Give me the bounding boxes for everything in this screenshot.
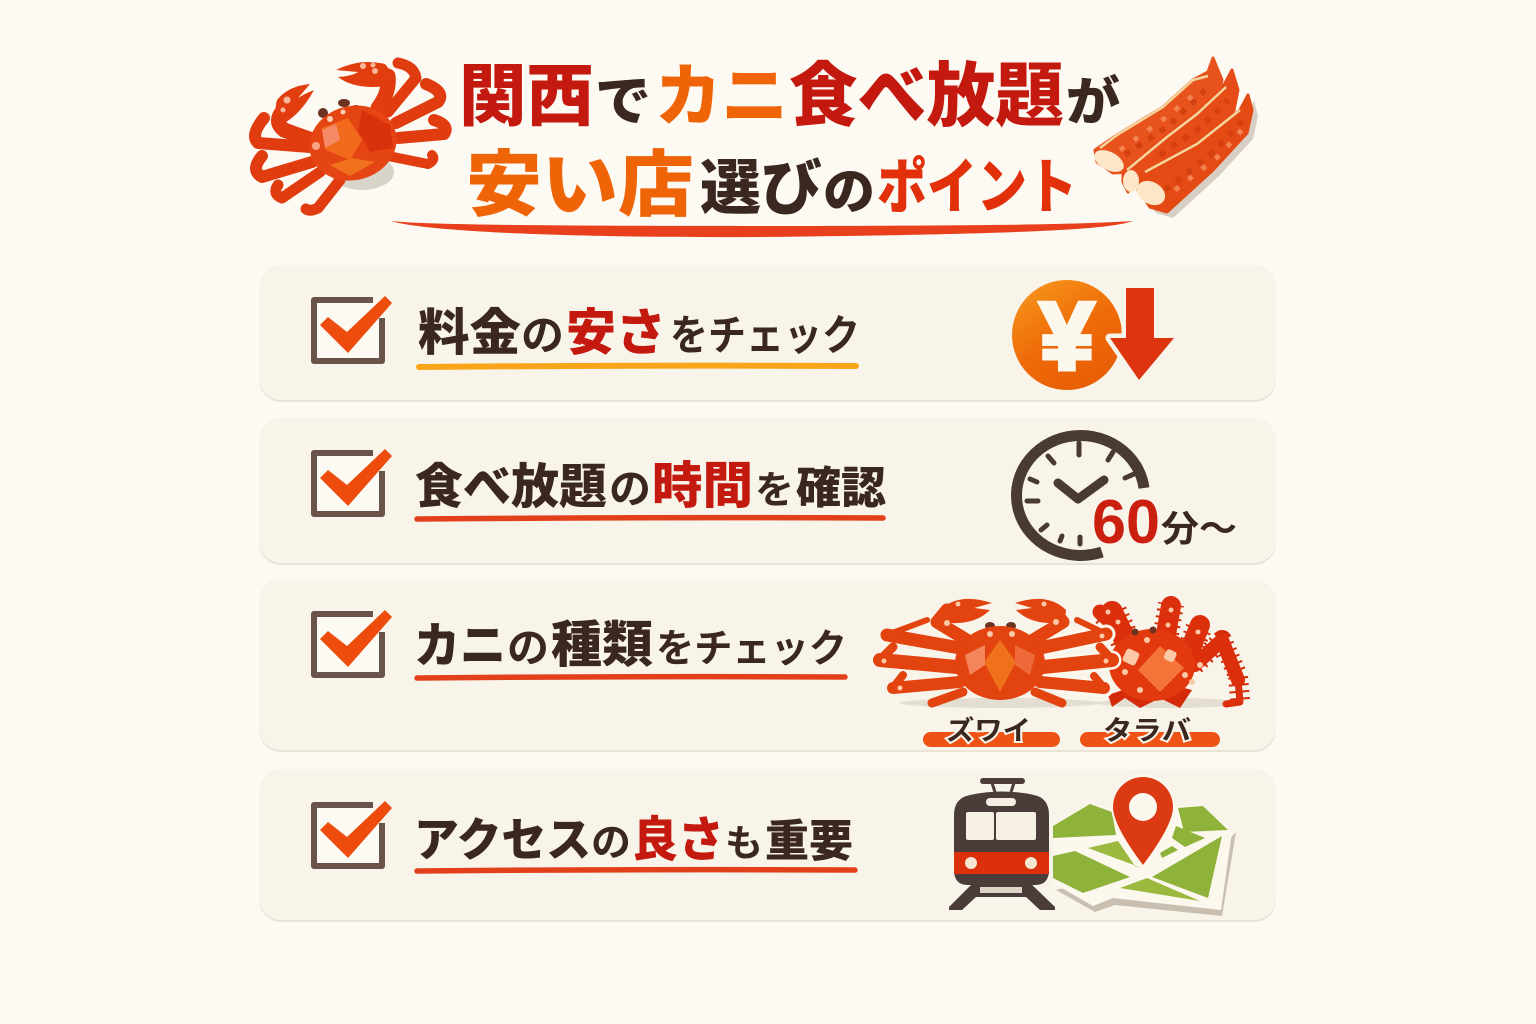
underline (417, 677, 845, 678)
title: 安い店 (466, 126, 694, 231)
title: で (595, 57, 651, 136)
panel: アクセス (259, 769, 1276, 922)
checkbox 4 (314, 801, 392, 866)
title: 食べ放題 (789, 40, 1064, 141)
text: アクセスの良さも重要 (414, 800, 853, 870)
text: アクセスの良さも重要: アクセス (414, 804, 591, 870)
icon: snow crab (880, 599, 1112, 708)
label: タラバ (1080, 709, 1220, 748)
label: ズワイ: ズワイ (946, 709, 1031, 748)
panel: 時間 (259, 418, 1276, 565)
underline (417, 518, 883, 519)
text: アクセスの良さも重要: の (591, 812, 631, 868)
icon: yen down: ¥ (1040, 283, 1094, 390)
icon: map (1053, 803, 1236, 916)
text: 食べ放題の時間を確認: 確認 (796, 452, 886, 516)
checkbox 3 (314, 610, 392, 675)
text: 料金の安さをチェック: 料金 (418, 293, 521, 365)
text: アクセスの良さも重要: 良さ (632, 800, 724, 870)
title: が (1066, 60, 1120, 135)
title: 関西 (459, 41, 594, 140)
label: ズワイ (923, 709, 1060, 748)
title: カニ (655, 41, 788, 140)
label: 60分〜: 分〜 (1161, 500, 1237, 552)
text: カニの種類をチェック: の (507, 614, 549, 674)
underline (417, 870, 855, 871)
icon: crab legs (1091, 58, 1258, 218)
text: カニの種類をチェック (414, 605, 847, 677)
text: アクセスの良さも重要: も (725, 813, 763, 867)
text: カニの種類をチェック: をチェック (656, 618, 847, 674)
checkbox 1 (314, 296, 392, 361)
label: 60分〜: 60 (1092, 488, 1160, 557)
text: 料金の安さをチェック (418, 293, 860, 365)
title (459, 40, 1120, 231)
text: 食べ放題の時間を確認: を (755, 459, 794, 514)
checkbox 2 (314, 449, 392, 514)
text: 食べ放題の時間を確認: 食べ放題 (415, 447, 607, 517)
title: の (823, 152, 875, 224)
icon: red king crab (1098, 604, 1242, 708)
text: 食べ放題の時間を確認: の (609, 455, 651, 515)
panel: カニの種類 (259, 579, 1276, 752)
label: タラバ: タラバ (1103, 709, 1191, 748)
text: 食べ放題の時間を確認 (415, 446, 886, 518)
text: 料金の安さをチェック: の (521, 302, 564, 363)
underline (419, 366, 856, 367)
icon: yen down (1012, 280, 1174, 390)
text: カニの種類をチェック: 種類 (551, 605, 653, 677)
text: 食べ放題の時間を確認: 時間 (652, 446, 753, 518)
title: ポイント (877, 139, 1077, 226)
title underline (391, 221, 1133, 237)
label: 60分〜 (1092, 488, 1237, 557)
icon: train (949, 778, 1055, 910)
icon: map pin (1113, 777, 1173, 865)
text: アクセスの良さも重要: 重要 (765, 805, 853, 869)
text: 料金の安さをチェック: をチェック (670, 302, 860, 363)
title: 選び (700, 140, 822, 227)
text: 料金の安さをチェック: 安さ (566, 293, 666, 365)
icon: crab top left (255, 62, 446, 210)
text: カニの種類をチェック: カニ (414, 606, 506, 676)
icon: clock (1017, 435, 1237, 557)
panel: 料金 (259, 265, 1276, 402)
